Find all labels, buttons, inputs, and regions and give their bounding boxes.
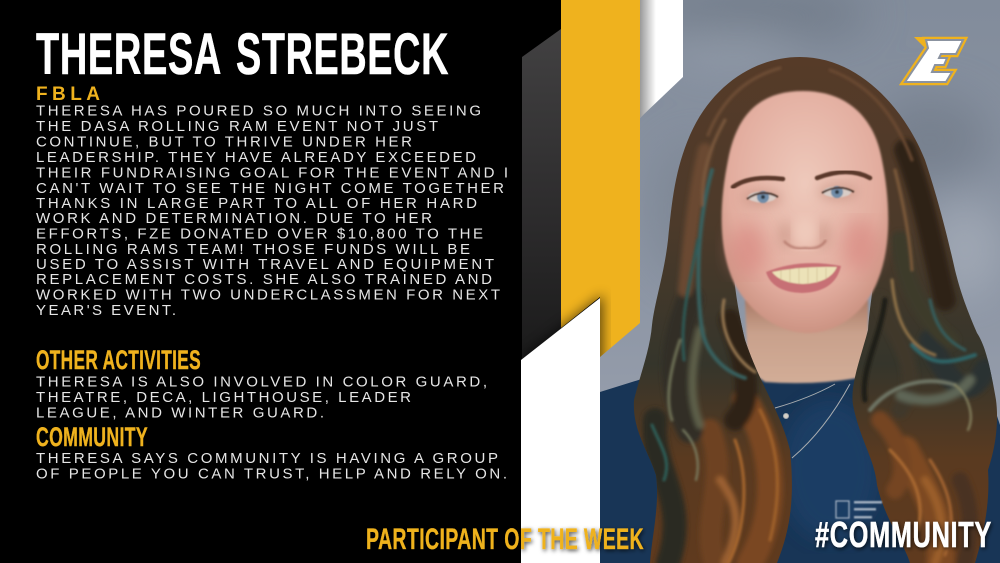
mouth [766,263,841,293]
other activities paragraph [36,374,487,422]
white top accent [640,0,683,118]
hair strands [652,68,985,563]
FBLA paragraph: THEIR FUNDRAISING GOAL FOR THE EVENT AND I [36,164,508,182]
community paragraph: THERESA SAYS COMMUNITY IS HAVING A GROUP [36,450,498,467]
FBLA paragraph: USED TO ASSIST WITH TRAVEL AND EQUIPMENT [36,256,494,273]
cheeks [730,219,878,276]
nose [793,216,817,248]
participant of the week label: PARTICIPANT OF THE WEEK [366,523,644,556]
school E logo [905,37,963,82]
FBLA paragraph: THANKS IN LARGE PART TO ALL OF HER HARD [36,195,477,212]
white lower stripe [521,298,600,563]
FBLA paragraph [36,102,508,319]
FBLA paragraph: WORK AND DETERMINATION. DUE TO HER [36,210,432,227]
FBLA paragraph: ROLLING RAMS TEAM! THOSE FUNDS WILL BE [36,241,470,258]
FBLA paragraph: CONTINUE, BUT TO THRIVE UNDER HER [36,134,412,150]
shirt [600,362,1000,563]
gold stripe [561,0,640,357]
community paragraph [36,450,507,482]
name title: STREBECK [236,22,449,87]
white stripe shadow [528,290,611,357]
eyes [747,186,854,203]
student portrait photo [600,0,1000,563]
shadow of gold stripe on white accent [640,0,656,118]
shirt logo [836,501,882,518]
name title [36,22,449,87]
dark grey stripe [522,29,561,362]
FBLA paragraph: REPLACEMENT COSTS. SHE ALSO TRAINED AND [36,271,492,288]
FBLA paragraph: CAN'T WAIT TO SEE THE NIGHT COME TOGETHER [36,180,504,197]
FBLA paragraph: WORKED WITH TWO UNDERCLASSMEN FOR NEXT [36,286,500,304]
other activities paragraph: LEAGUE, AND WINTER GUARD. [36,404,324,422]
face [722,91,888,333]
other activities heading: OTHER ACTIVITIES [36,345,201,375]
other activities paragraph: THERESA IS ALSO INVOLVED IN COLOR GUARD, [36,374,487,390]
eye socket shading [742,185,858,249]
necklace [775,384,850,458]
FBLA paragraph: EFFORTS, FZE DONATED OVER $10,800 TO THE [36,226,483,242]
FBLA heading: FBLA [36,84,100,105]
FBLA paragraph: THERESA HAS POURED SO MUCH INTO SEEING [36,102,481,120]
name title: THERESA [36,22,222,87]
other activities paragraph: THEATRE, DECA, LIGHTHOUSE, LEADER [36,389,411,406]
FBLA paragraph: LEADERSHIP. THEY HAVE ALREADY EXCEEDED [36,149,476,166]
neck [745,300,868,383]
hair mass [620,40,1000,563]
FBLA paragraph: YEAR'S EVENT. [36,302,176,319]
FBLA paragraph: THE DASA ROLLING RAM EVENT NOT JUST [36,118,438,135]
community heading: COMMUNITY [36,422,148,452]
brows [733,172,870,187]
community paragraph: OF PEOPLE YOU CAN TRUST, HELP AND RELY ON. [36,466,507,482]
